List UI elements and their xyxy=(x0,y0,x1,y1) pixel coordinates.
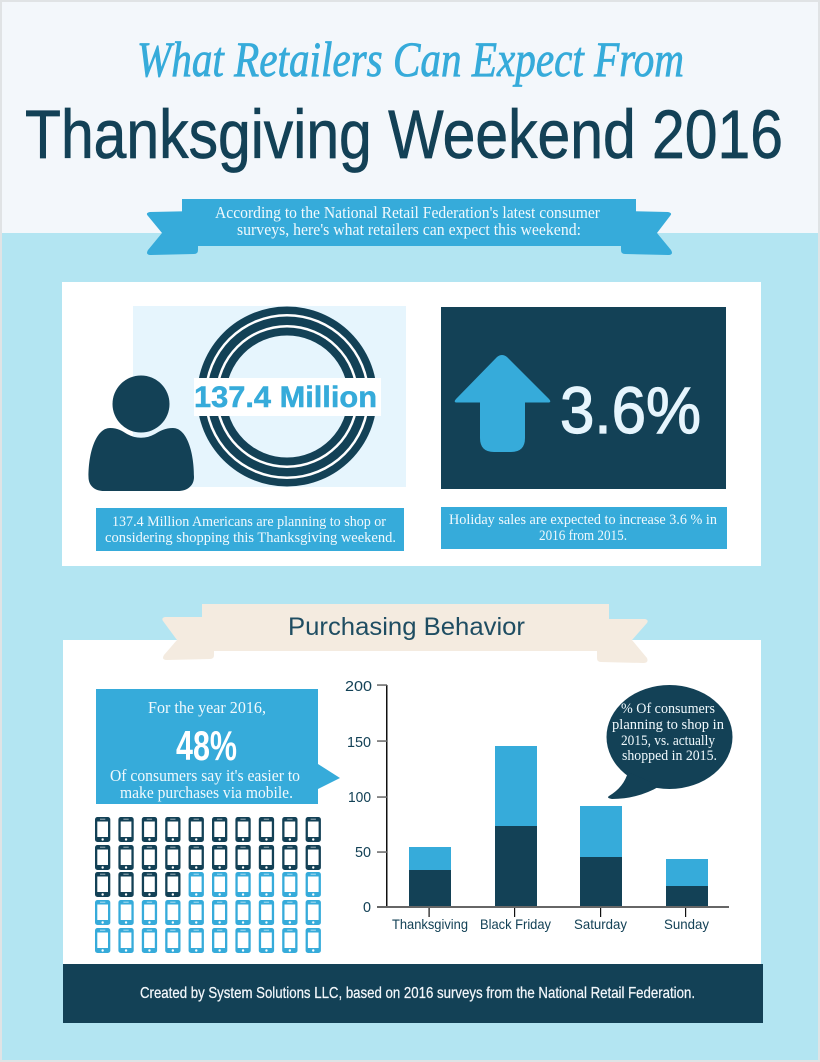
bars: Sunday xyxy=(666,859,708,907)
callout: mobile 48% xyxy=(96,689,340,804)
y axis: 50 xyxy=(355,844,371,861)
x axis: Sunday xyxy=(664,916,709,932)
title line 1: What Retailers Can Expect From xyxy=(137,31,684,87)
bars: Black Friday xyxy=(495,746,537,907)
callout: mobile 48%: For the year 2016, xyxy=(148,698,266,717)
ribbon: intro: surveys, here's what retailers can expect this weekend: xyxy=(237,220,581,239)
concentric rings xyxy=(197,306,377,486)
y axis: 100 xyxy=(348,789,371,806)
footer credit: Created by System Solutions LLC, based on 2016 surveys from the National Retail Federation. xyxy=(140,985,695,1002)
speech bubble: chart legend: shopped in 2015. xyxy=(622,748,717,764)
caption: shoppers: considering shopping this Thanksgiving weekend. xyxy=(105,530,396,546)
icon grid: phones xyxy=(95,817,321,953)
shoppers graphic xyxy=(88,306,406,491)
stat: 48%: 48% xyxy=(176,722,237,769)
caption: sales xyxy=(441,507,727,549)
stat: 3.6%: 3.6% xyxy=(560,373,701,447)
callout: mobile 48%: Of consumers say it's easier to xyxy=(110,766,300,785)
heading: Purchasing Behavior xyxy=(288,613,525,641)
ribbon: intro xyxy=(147,199,672,255)
x axis: Saturday xyxy=(574,916,627,932)
intro text: According to the National Retail Federation's latest consumer xyxy=(215,203,600,222)
caption: sales: Holiday sales are expected to increase 3.6 % in xyxy=(449,512,717,528)
icon: up arrow xyxy=(455,355,550,452)
x axis: Black Friday xyxy=(480,916,551,932)
stat: 137.4 Million: 137.4 Million xyxy=(194,381,377,414)
x axis: Thanksgiving xyxy=(392,916,468,932)
y axis: 200 xyxy=(345,678,372,695)
y axis xyxy=(345,678,388,916)
sales graphic xyxy=(441,307,726,489)
panel: purchasing behavior xyxy=(63,604,761,964)
caption: shoppers xyxy=(96,508,404,551)
bars: Saturday xyxy=(580,806,622,907)
bar chart xyxy=(345,678,729,932)
icon: person xyxy=(88,376,194,491)
ribbon: purchasing behavior heading xyxy=(162,604,648,663)
y axis: 0 xyxy=(363,899,371,916)
panel: shopper stats xyxy=(62,282,761,566)
speech bubble: chart legend: % Of consumers xyxy=(621,701,715,717)
speech bubble: chart legend xyxy=(606,685,732,799)
speech bubble: chart legend: 2015, vs. actually xyxy=(621,733,715,749)
bars: Thanksgiving xyxy=(409,847,451,907)
speech bubble: chart legend: planning to shop in xyxy=(612,717,724,733)
caption: shoppers: 137.4 Million Americans are planning to shop or xyxy=(112,514,386,530)
caption: sales: 2016 from 2015. xyxy=(539,528,627,544)
y axis: 150 xyxy=(347,734,371,751)
title xyxy=(25,31,783,173)
callout: mobile 48%: make purchases via mobile. xyxy=(120,783,293,802)
x axis xyxy=(377,906,729,932)
footer xyxy=(63,964,763,1023)
